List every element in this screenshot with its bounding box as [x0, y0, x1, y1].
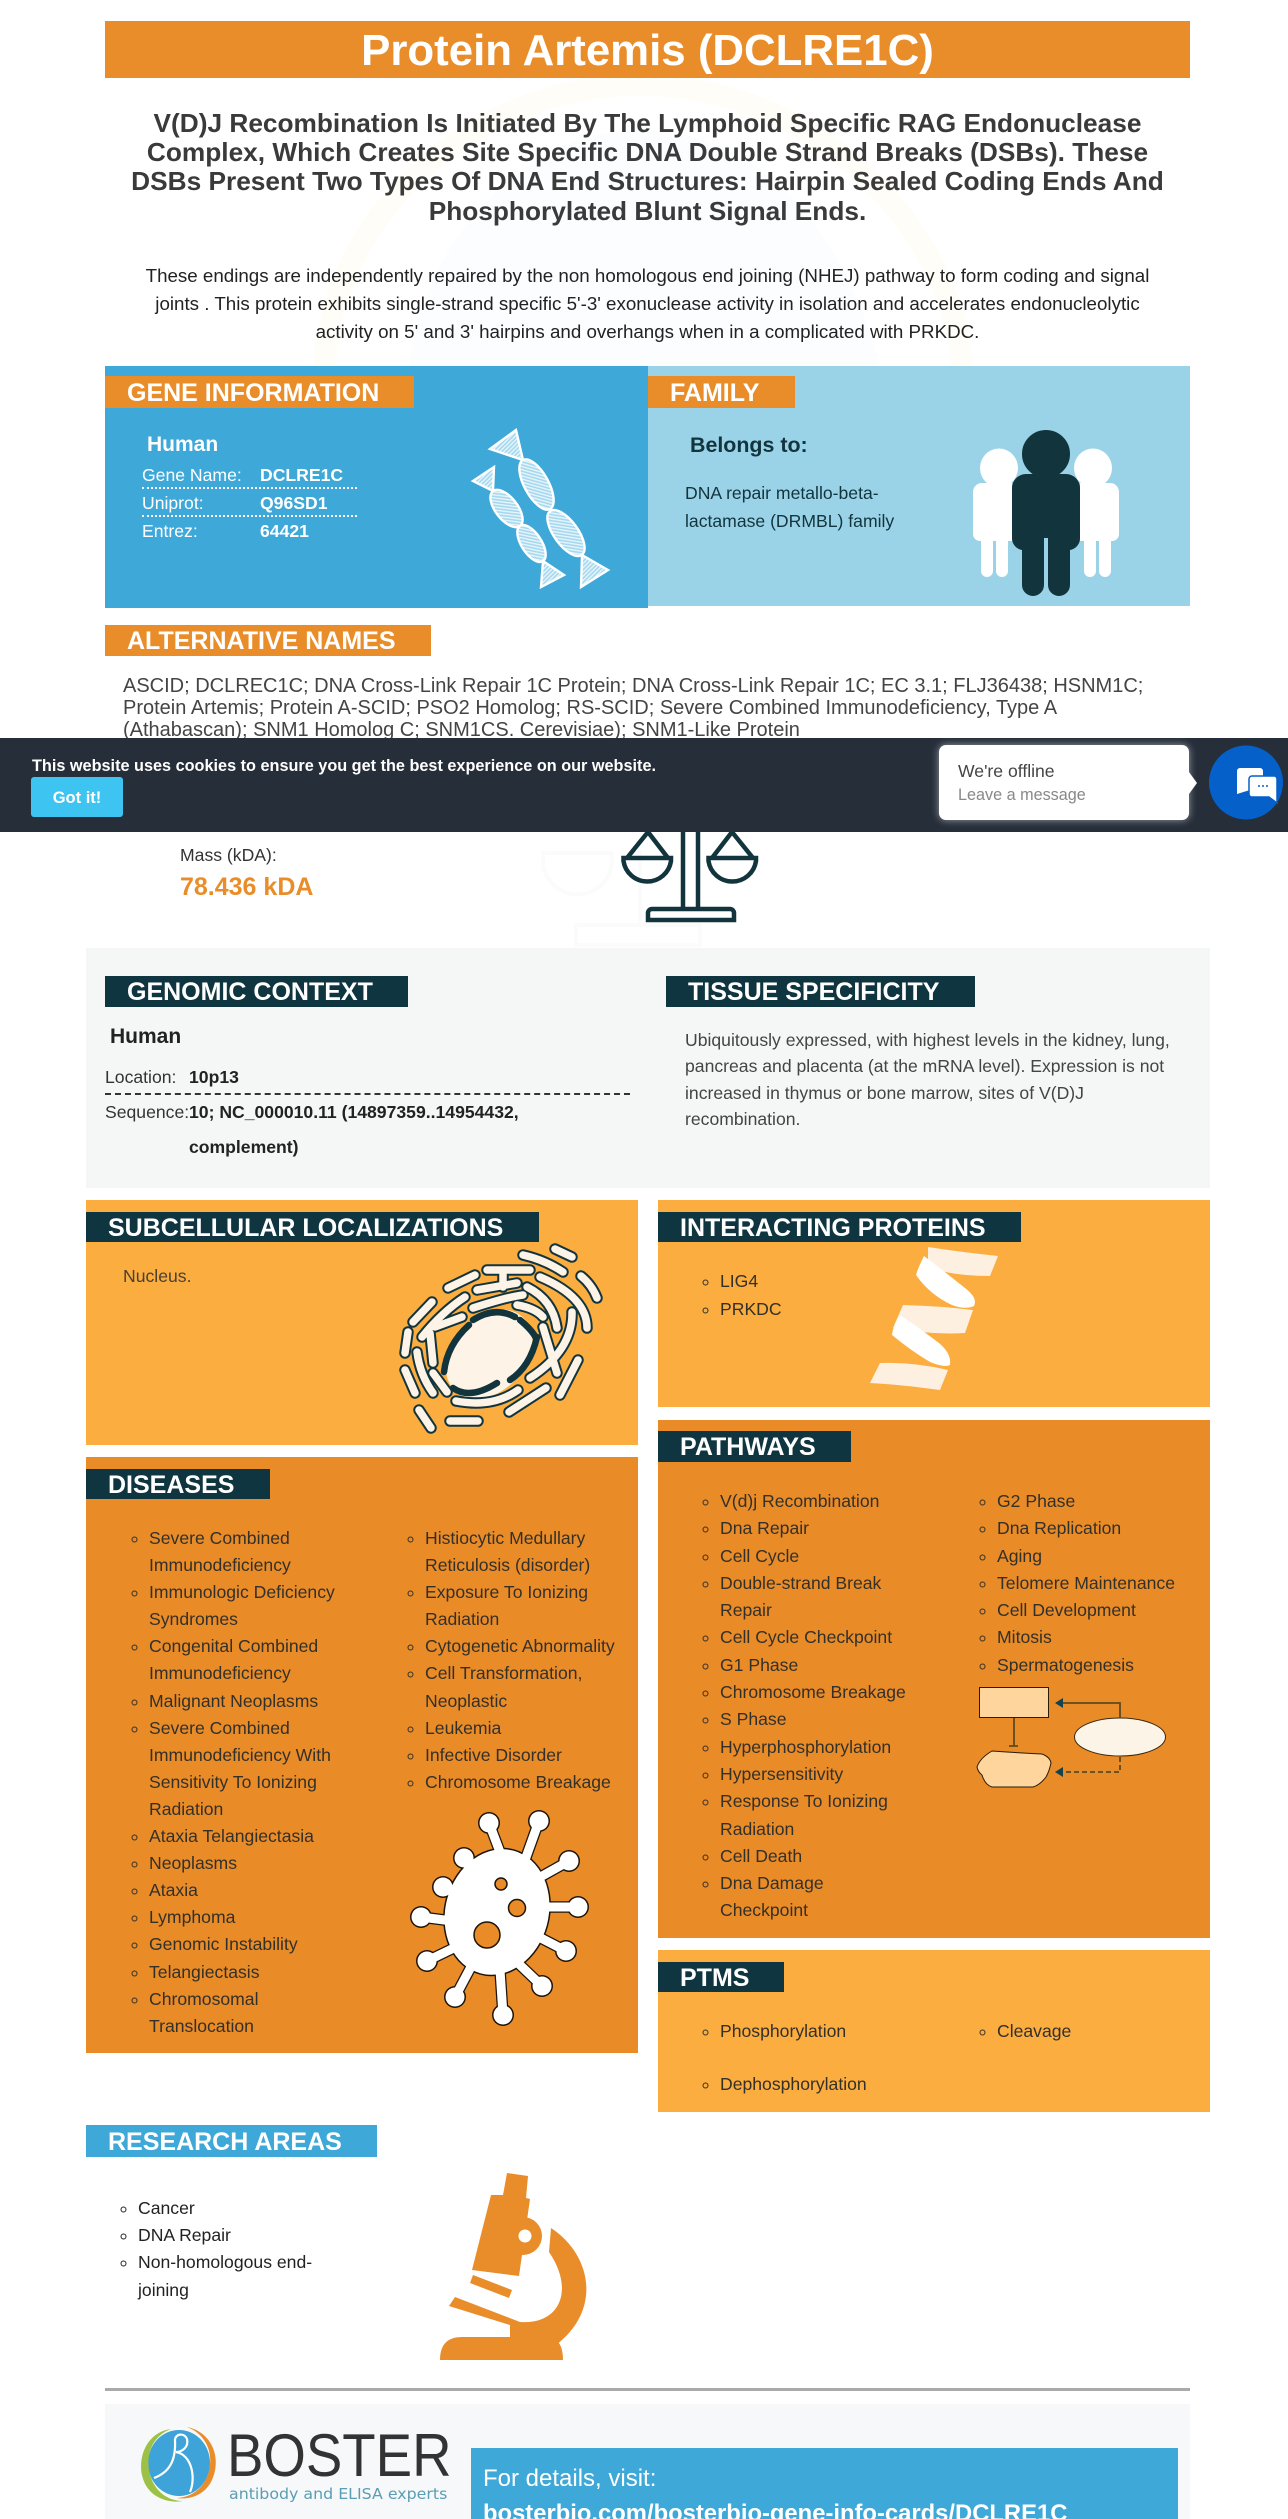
diseases list left column: Malignant Neoplasms — [149, 1691, 318, 1711]
icon: protein helix — [870, 1247, 998, 1390]
pathways list left column: Cell Cycle — [720, 1546, 799, 1566]
description paragraph: joints . This protein exhibits single-strand specific 5'-3' exonuclease activity in isolation and accelerates endonucleolytic — [155, 293, 1140, 314]
family text: lactamase (DRMBL) family — [685, 511, 894, 531]
sequence row: 10; NC_000010.11 (14897359..14954432, — [189, 1102, 519, 1122]
divider line — [105, 2388, 1190, 2391]
pathways list left column: Radiation — [720, 1819, 794, 1839]
ptm item: phosphorylation: Phosphorylation — [720, 2021, 846, 2041]
diseases list right column: Histiocytic Medullary — [425, 1528, 585, 1548]
pathways list left column: G1 Phase — [720, 1655, 798, 1675]
family text: DNA repair metallo-beta- — [685, 483, 879, 503]
panel: context and tissue: 10p13 — [189, 1067, 239, 1087]
offline text: We're offline — [958, 761, 1055, 781]
belongs to label: Belongs to: — [690, 433, 808, 457]
pathways list left column: Chromosome Breakage — [720, 1682, 906, 1702]
diseases list right column — [408, 1528, 615, 1792]
entrez row: 64421 — [260, 521, 309, 541]
diseases list left column: Severe Combined — [149, 1718, 290, 1738]
pathways list left column: Checkpoint — [720, 1900, 808, 1920]
pathways list right column: Mitosis — [997, 1627, 1052, 1647]
pathways list left column: Dna Repair — [720, 1518, 809, 1538]
icon: dna helix — [470, 428, 610, 590]
pathways list left column: Hyperphosphorylation — [720, 1737, 891, 1757]
tissue text: Ubiquitously expressed, with highest levels in the kidney, lung, — [685, 1030, 1170, 1050]
diseases list left column: Immunodeficiency — [149, 1555, 291, 1575]
title: Protein Artemis (DCLRE1C) — [361, 26, 934, 75]
diseases list left column — [132, 1528, 335, 2036]
panel: footer — [105, 2404, 1190, 2519]
diseases list left column: Immunologic Deficiency — [149, 1582, 335, 1602]
heading: family: FAMILY — [670, 379, 759, 407]
sequence row — [105, 1093, 630, 1147]
pathways list left column: Cell Death — [720, 1846, 802, 1866]
diseases list left column: Telangiectasis — [149, 1962, 260, 1982]
diseases list left column: Lymphoma — [149, 1907, 235, 1927]
location row — [105, 1067, 239, 1087]
chat message bubble — [939, 745, 1189, 820]
heading summary: Complex, Which Creates Site Specific DNA Double Strand Breaks (DSBs). These — [147, 137, 1148, 167]
button: got it — [31, 777, 123, 817]
research areas list — [120, 2198, 312, 2300]
heading: genomic context: GENOMIC CONTEXT — [127, 978, 373, 1006]
heading: gene information: GENE INFORMATION — [127, 379, 379, 407]
description paragraph — [146, 265, 1149, 342]
species label: Human — [110, 1025, 181, 1048]
tissue text: increased in thymus or bone marrow, sites of V(D)J — [685, 1083, 1084, 1103]
pathways list right column: G2 Phase — [997, 1491, 1075, 1511]
cookie message: This website uses cookies to ensure you get the best experience on our website. — [32, 757, 656, 775]
tissue text — [685, 1030, 1170, 1129]
leave a message text: Leave a message — [958, 786, 1086, 804]
pathways list left column: Dna Damage — [720, 1873, 824, 1893]
heading summary: V(D)J Recombination Is Initiated By The Lymphoid Specific RAG Endonuclease — [154, 108, 1141, 138]
panel: ptms — [658, 1950, 1210, 2112]
interacting proteins list: LIG4 — [720, 1271, 758, 1291]
diseases list left column: Ataxia Telangiectasia — [149, 1826, 314, 1846]
description paragraph: These endings are independently repaired by the non homologous end joining (NHEJ) pathway to form coding and signal — [146, 265, 1149, 286]
heading: diseases: DISEASES — [108, 1471, 234, 1499]
uniprot row — [142, 490, 357, 517]
heading summary — [131, 108, 1164, 226]
pathways list right column: Aging — [997, 1546, 1042, 1566]
icon: balance scale — [621, 832, 758, 922]
logo tagline: antibody and ELISA experts — [229, 2485, 447, 2503]
diseases list left column: Immunodeficiency With — [149, 1745, 331, 1765]
pathways list right column — [980, 1491, 1175, 1675]
diseases list right column: Leukemia — [425, 1718, 501, 1738]
heading: family — [648, 376, 795, 408]
panel: interacting proteins — [658, 1200, 1210, 1407]
cookie banner — [0, 738, 1288, 832]
button: got it: Got it! — [53, 789, 101, 807]
pathways list left column: Repair — [720, 1600, 772, 1620]
interacting proteins list: PRKDC — [720, 1299, 782, 1319]
alternative names text: Protein Artemis; Protein A-SCID; PSO2 Homolog; RS-SCID; Severe Combined Immunodeficiency, Type A — [123, 697, 1057, 719]
panel: pathways — [658, 1420, 1210, 1938]
heading: research areas: RESEARCH AREAS — [108, 2128, 342, 2156]
entrez row — [142, 521, 309, 541]
diseases list right column: Exposure To Ionizing — [425, 1582, 588, 1602]
pathways list left column — [702, 1491, 906, 1920]
tissue text: recombination. — [685, 1109, 800, 1129]
diseases list left column: Syndromes — [149, 1609, 238, 1629]
title — [105, 21, 1190, 78]
sequence row: complement) — [189, 1137, 298, 1157]
research areas list: joining — [138, 2280, 189, 2300]
logo mark — [141, 2427, 216, 2502]
details box — [471, 2448, 1178, 2519]
location row: Location: — [105, 1067, 176, 1087]
icon: chat pointer — [1189, 772, 1197, 794]
icon: people group — [973, 430, 1119, 596]
diseases list left column: Chromosomal — [149, 1989, 259, 2009]
mass value: 78.436 kDA — [180, 873, 313, 901]
diseases list left column: Neoplasms — [149, 1853, 237, 1873]
diseases list right column: Cytogenetic Abnormality — [425, 1636, 615, 1656]
icon: chat button — [1209, 746, 1283, 820]
diseases list left column: Sensitivity To Ionizing — [149, 1772, 317, 1792]
diseases list right column: Cell Transformation, — [425, 1663, 582, 1683]
localization text: Nucleus. — [123, 1266, 191, 1286]
uniprot row: Uniprot: — [142, 493, 204, 513]
interacting proteins list — [702, 1271, 782, 1319]
heading summary: Phosphorylated Blunt Signal Ends. — [429, 196, 866, 226]
ptm item: cleavage: Cleavage — [997, 2021, 1071, 2041]
entrez row: Entrez: — [142, 521, 198, 541]
uniprot row: Q96SD1 — [260, 493, 327, 513]
alternative names text: (Athabascan); SNM1 Homolog C; SNM1CS. Cerevisiae); SNM1-Like Protein — [123, 719, 800, 741]
pathways list left column: V(d)j Recombination — [720, 1491, 879, 1511]
sequence row: Sequence: — [105, 1102, 189, 1122]
ptm item: dephosphorylation: Dephosphorylation — [720, 2074, 867, 2094]
heading: ptms — [658, 1962, 784, 1992]
heading: ptms: PTMS — [680, 1964, 749, 1992]
description paragraph: activity on 5' and 3' hairpins and overhangs when in a complicated with PRKDC. — [316, 321, 979, 342]
panel: diseases — [86, 1457, 638, 2053]
heading: interacting proteins: INTERACTING PROTEINS — [680, 1214, 986, 1242]
panel: context and tissue — [86, 948, 1210, 1188]
panel: family — [648, 366, 1190, 606]
research areas list: DNA Repair — [138, 2225, 231, 2245]
pathways list left column: Response To Ionizing — [720, 1791, 888, 1811]
heading summary: DSBs Present Two Types Of DNA End Structures: Hairpin Sealed Coding Ends And — [131, 166, 1164, 196]
background watermark — [300, 70, 990, 370]
pathways list left column: Cell Cycle Checkpoint — [720, 1627, 892, 1647]
pathways list right column: Dna Replication — [997, 1518, 1121, 1538]
icon: microscope — [440, 2173, 586, 2360]
tissue text: pancreas and placenta (at the mRNA level). Expression is not — [685, 1056, 1164, 1076]
mass label: Mass (kDA): — [180, 845, 277, 865]
pathways list left column: Double-strand Break — [720, 1573, 881, 1593]
alternative names text — [123, 675, 1143, 741]
heading: alternative names: ALTERNATIVE NAMES — [127, 627, 396, 655]
diseases list left column: Radiation — [149, 1799, 223, 1819]
diseases list right column: Reticulosis (disorder) — [425, 1555, 590, 1575]
pathways list left column: Hypersensitivity — [720, 1764, 843, 1784]
diseases list left column: Translocation — [149, 2016, 254, 2036]
diseases list right column: Radiation — [425, 1609, 499, 1629]
heading: pathways: PATHWAYS — [680, 1433, 816, 1461]
icon: pathway diagram — [976, 1687, 1166, 1788]
pathways list right column: Cell Development — [997, 1600, 1136, 1620]
heading: tissue specificity: TISSUE SPECIFICITY — [688, 978, 939, 1006]
details label: For details, visit: — [483, 2465, 656, 2492]
research areas list: Cancer — [138, 2198, 195, 2218]
panel: subcellular localizations — [86, 1200, 638, 1445]
heading: pathways — [658, 1431, 851, 1462]
diseases list right column: Infective Disorder — [425, 1745, 562, 1765]
family text — [685, 483, 894, 531]
logo wordmark: BOSTER — [227, 2422, 452, 2489]
gene name row: DCLRE1C — [260, 465, 343, 485]
species label: Human — [147, 433, 218, 456]
pathways list right column: Telomere Maintenance — [997, 1573, 1175, 1593]
diseases list right column: Neoplastic — [425, 1691, 507, 1711]
heading: subcellular localizations: SUBCELLULAR LOCALIZATIONS — [108, 1214, 503, 1242]
heading: diseases — [86, 1469, 270, 1499]
icon: virus — [410, 1810, 589, 2026]
diseases list left column: Ataxia — [149, 1880, 198, 1900]
pathways list left column: S Phase — [720, 1709, 787, 1729]
icon: nucleus and endoplasmic reticulum — [399, 1243, 603, 1434]
diseases list left column: Genomic Instability — [149, 1934, 298, 1954]
research areas list: Non-homologous end- — [138, 2252, 312, 2272]
pathways list right column: Spermatogenesis — [997, 1655, 1134, 1675]
diseases list left column: Severe Combined — [149, 1528, 290, 1548]
gene name row — [142, 462, 357, 489]
gene name row: Gene Name: — [142, 465, 242, 485]
diseases list right column: Chromosome Breakage — [425, 1772, 611, 1792]
panel: gene information — [105, 366, 648, 608]
diseases list left column: Immunodeficiency — [149, 1663, 291, 1683]
alternative names text: ASCID; DCLREC1C; DNA Cross-Link Repair 1C Protein; DNA Cross-Link Repair 1C; EC 3.1; FLJ36438; HSNM1C; — [123, 675, 1143, 697]
diseases list left column: Congenital Combined — [149, 1636, 318, 1656]
